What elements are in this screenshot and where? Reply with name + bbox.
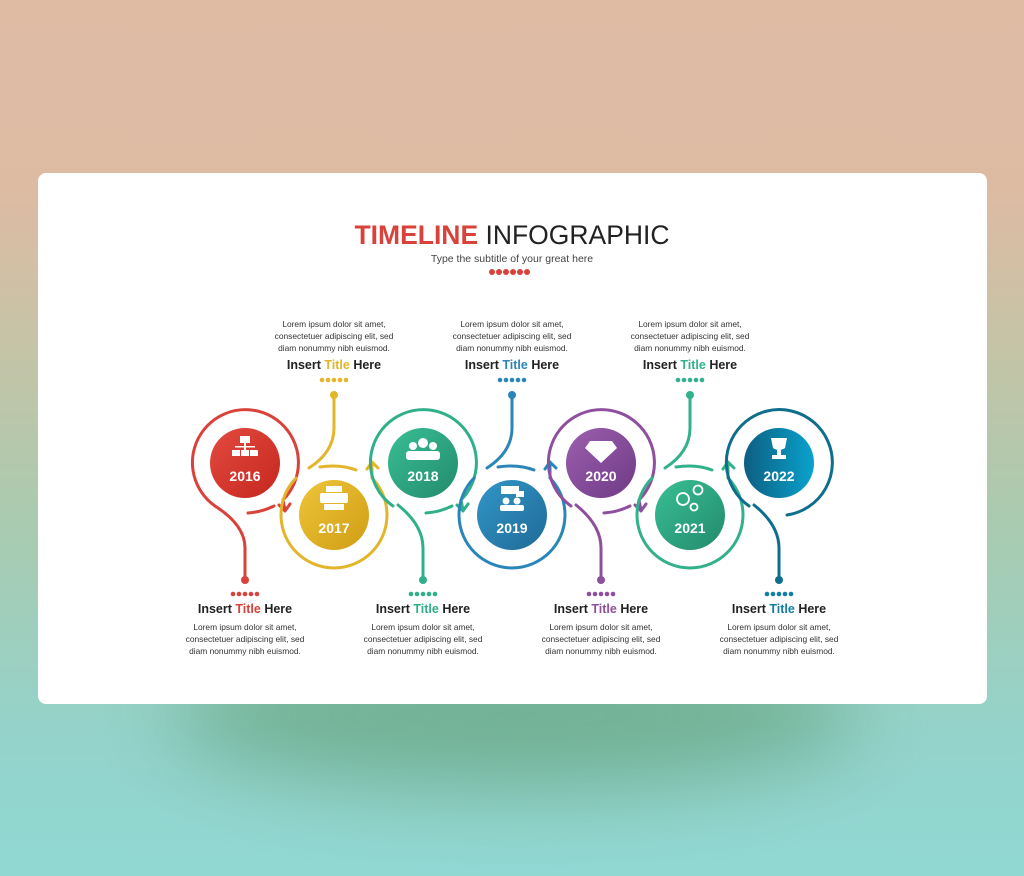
title: TIMELINE INFOGRAPHIC bbox=[354, 220, 670, 250]
text 2016 bbox=[186, 622, 304, 656]
text 2018: Lorem ipsum dolor sit amet, bbox=[371, 622, 475, 632]
text 2021 top: consectetuer adipiscing elit, sed bbox=[631, 331, 749, 341]
step 2020 bbox=[548, 410, 654, 584]
text 2022: consectetuer adipiscing elit, sed bbox=[720, 634, 838, 644]
small dots rows bbox=[231, 378, 793, 596]
text 2020: Lorem ipsum dolor sit amet, bbox=[549, 622, 653, 632]
heading 2019: Insert Title Here bbox=[465, 358, 559, 372]
text 2016: consectetuer adipiscing elit, sed bbox=[186, 634, 304, 644]
text 2018: consectetuer adipiscing elit, sed bbox=[364, 634, 482, 644]
heading 2017: Insert Title Here bbox=[287, 358, 381, 372]
heading 2021: Insert Title Here bbox=[643, 358, 737, 372]
text 2021 top: Lorem ipsum dolor sit amet, bbox=[638, 319, 742, 329]
text 2020 bbox=[542, 622, 660, 656]
text 2016: diam nonummy nibh euismod. bbox=[189, 646, 301, 656]
text 2017 top bbox=[275, 319, 393, 353]
text 2016: Lorem ipsum dolor sit amet, bbox=[193, 622, 297, 632]
heading 2020: Insert Title Here bbox=[554, 602, 648, 616]
step 2019: 2019 bbox=[496, 520, 528, 536]
heading 2016: Insert Title Here bbox=[198, 602, 292, 616]
heading 2018: Insert Title Here bbox=[376, 602, 470, 616]
step 2019 bbox=[459, 391, 565, 568]
step 2016: 2016 bbox=[229, 468, 261, 484]
step 2022: 2022 bbox=[763, 468, 795, 484]
text 2022: Lorem ipsum dolor sit amet, bbox=[727, 622, 831, 632]
step 2017 bbox=[281, 391, 387, 568]
text 2019 top: consectetuer adipiscing elit, sed bbox=[453, 331, 571, 341]
text 2018: diam nonummy nibh euismod. bbox=[367, 646, 479, 656]
text 2021 top bbox=[631, 319, 749, 353]
step 2020: 2020 bbox=[585, 468, 617, 484]
step 2017: 2017 bbox=[318, 520, 350, 536]
text 2021 top: diam nonummy nibh euismod. bbox=[634, 343, 746, 353]
text 2017 top: diam nonummy nibh euismod. bbox=[278, 343, 390, 353]
text 2017 top: consectetuer adipiscing elit, sed bbox=[275, 331, 393, 341]
step 2021 bbox=[637, 391, 743, 568]
text 2020: diam nonummy nibh euismod. bbox=[545, 646, 657, 656]
card panel bbox=[38, 173, 987, 704]
text 2019 top bbox=[453, 319, 571, 353]
step 2016 bbox=[192, 410, 298, 584]
step 2018: 2018 bbox=[407, 468, 439, 484]
subtitle: Type the subtitle of your great here bbox=[431, 253, 593, 265]
step 2021: 2021 bbox=[674, 520, 706, 536]
text 2020: consectetuer adipiscing elit, sed bbox=[542, 634, 660, 644]
text 2022: diam nonummy nibh euismod. bbox=[723, 646, 835, 656]
step 2018 bbox=[370, 410, 476, 584]
step 2022 bbox=[726, 410, 832, 584]
title dots bbox=[489, 269, 530, 275]
heading 2022: Insert Title Here bbox=[732, 602, 826, 616]
text 2017 top: Lorem ipsum dolor sit amet, bbox=[282, 319, 386, 329]
text 2018 bbox=[364, 622, 482, 656]
text 2019 top: diam nonummy nibh euismod. bbox=[456, 343, 568, 353]
text 2022 bbox=[720, 622, 838, 656]
text 2019 top: Lorem ipsum dolor sit amet, bbox=[460, 319, 564, 329]
